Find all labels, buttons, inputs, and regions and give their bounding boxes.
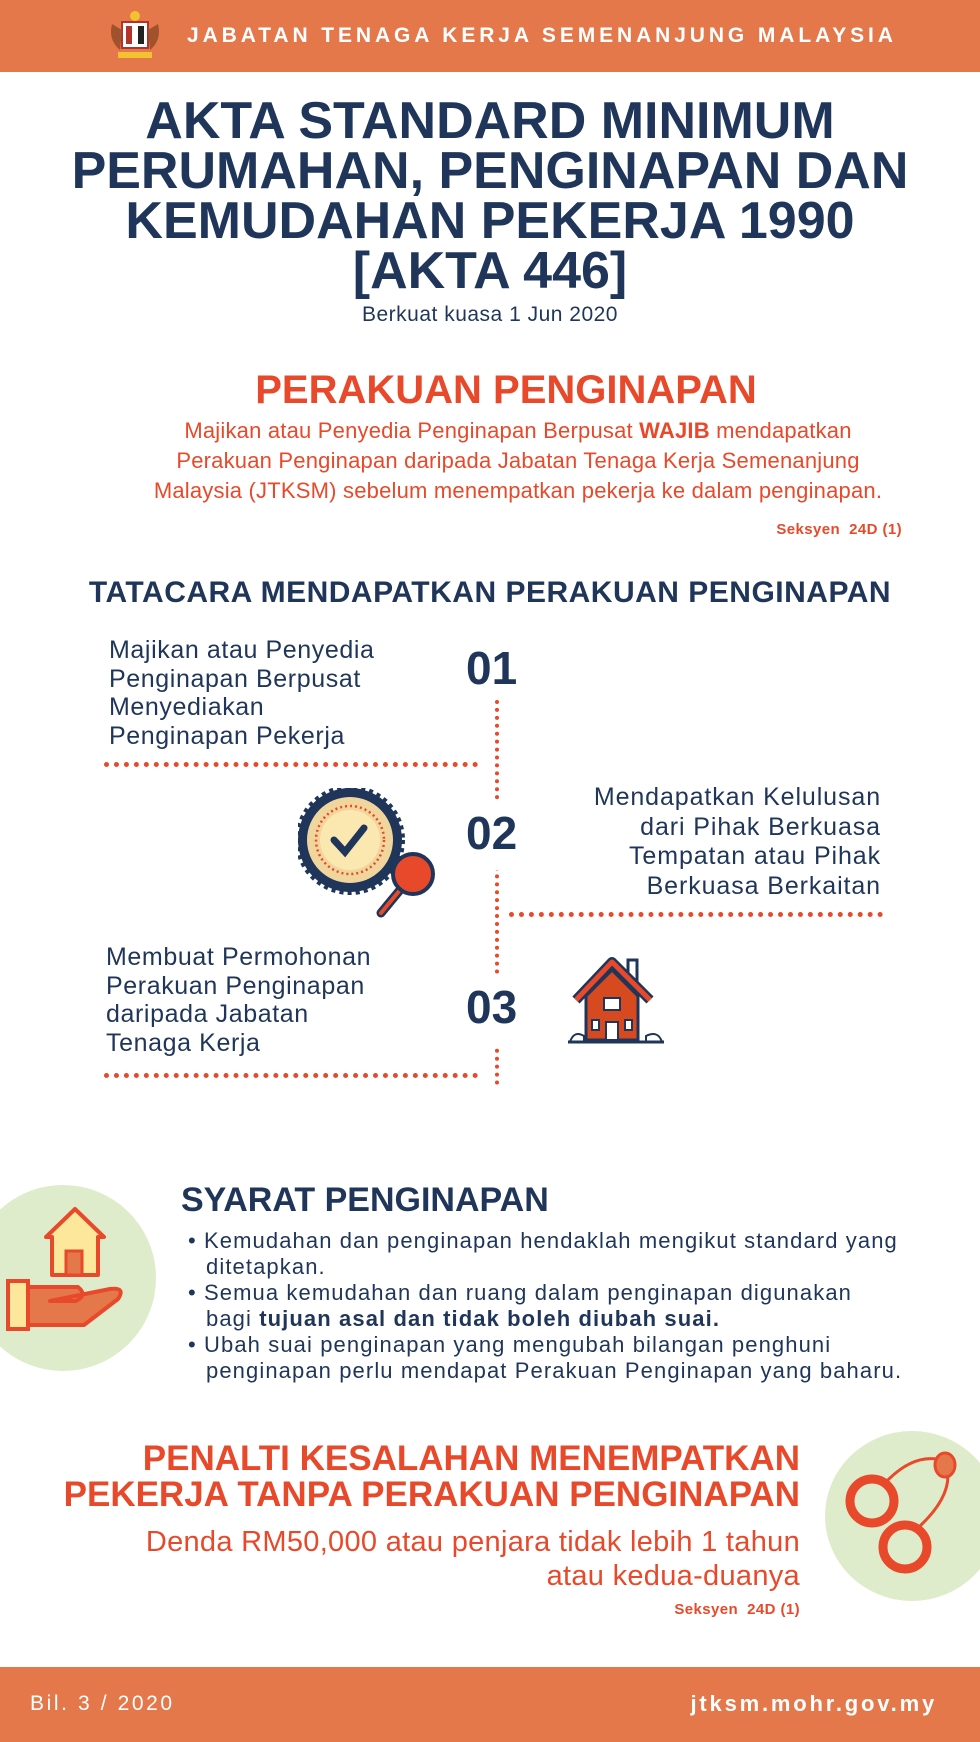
penalty heading: PEKERJA TANPA PERAKUAN PENGINAPAN: [64, 1475, 800, 1514]
perakuan paragraph: [154, 418, 882, 503]
step 3 text: Perakuan Penginapan: [106, 972, 365, 1000]
step 2 number: 02: [466, 807, 517, 859]
icon: hand holding house in green circle: [0, 1185, 156, 1371]
syarat bullet list: ditetapkan.: [206, 1254, 326, 1279]
icon: house: [568, 957, 664, 1044]
footer bar: [0, 1667, 980, 1742]
syarat bullet list: penginapan perlu mendapat Perakuan Penginapan yang baharu.: [206, 1358, 902, 1383]
step 2 number: [462, 802, 521, 870]
penalty heading: [64, 1439, 800, 1514]
step 1 number: 01: [466, 642, 517, 694]
title: PERUMAHAN, PENGINAPAN DAN: [72, 142, 908, 200]
section reference 1: Seksyen 24D (1): [776, 521, 902, 538]
perakuan paragraph: Majikan atau Penyedia Penginapan Berpusat WAJIB mendapatkan: [184, 418, 852, 443]
title: KEMUDAHAN PEKERJA 1990: [125, 192, 855, 250]
heading: tatacara: TATACARA MENDAPATKAN PERAKUAN PENGINAPAN: [89, 576, 891, 609]
step 3 text: Membuat Permohonan: [106, 943, 371, 971]
footer website: jtksm.mohr.gov.my: [691, 1691, 937, 1716]
step 1 text: Penginapan Pekerja: [109, 722, 345, 750]
syarat heading: SYARAT PENGINAPAN: [181, 1181, 549, 1219]
header text: JABATAN TENAGA KERJA SEMENANJUNG MALAYSIA: [187, 24, 897, 47]
step 2 text: dari Pihak Berkuasa: [640, 812, 881, 840]
syarat bullet list: bagi tujuan asal dan tidak boleh diubah suai.: [206, 1306, 720, 1331]
syarat bullet list: • Kemudahan dan penginapan hendaklah mengikut standard yang: [188, 1228, 898, 1253]
penalty text: Denda RM50,000 atau penjara tidak lebih 1 tahun: [146, 1526, 800, 1558]
step 3 number: [462, 974, 521, 1048]
section reference 2: Seksyen 24D (1): [674, 1601, 800, 1618]
syarat bullet list: • Ubah suai penginapan yang mengubah bilangan penghuni: [188, 1332, 831, 1357]
penalty heading: PENALTI KESALAHAN MENEMPATKAN: [143, 1439, 800, 1478]
step 3 text: [106, 943, 371, 1056]
vertical dotted line: [495, 700, 499, 1085]
penalty text: [146, 1526, 800, 1592]
penalty text: atau kedua-duanya: [547, 1560, 800, 1592]
icon: emblem: [111, 11, 159, 58]
step 3 number: 03: [466, 981, 517, 1033]
perakuan paragraph: Perakuan Penginapan daripada Jabatan Tenaga Kerja Semenanjung: [176, 448, 860, 473]
step 1 text: [109, 636, 375, 750]
step 1 text: Menyediakan: [109, 693, 264, 721]
step 2 text: [594, 783, 881, 900]
step 2 text: Mendapatkan Kelulusan: [594, 783, 881, 811]
panel: syarat penginapan: [0, 1181, 902, 1383]
perakuan paragraph: Malaysia (JTKSM) sebelum menempatkan pekerja ke dalam penginapan.: [154, 478, 882, 503]
step 3 text: daripada Jabatan: [106, 1000, 309, 1028]
title: [72, 92, 908, 300]
icon: handcuffs in green circle: [825, 1431, 980, 1601]
footer issue number: Bil. 3 / 2020: [30, 1692, 175, 1715]
title: [AKTA 446]: [353, 242, 627, 300]
step 2 text: Tempatan atau Pihak: [629, 842, 881, 870]
step 3 text: Tenaga Kerja: [106, 1028, 261, 1056]
step 1 text: Penginapan Berpusat: [109, 664, 361, 692]
icon: approval seal with magnifier: [298, 788, 435, 918]
step 1 text: Majikan atau Penyedia: [109, 636, 375, 664]
syarat bullet list: [188, 1228, 902, 1383]
title: AKTA STANDARD MINIMUM: [145, 92, 835, 150]
heading: perakuan penginapan: PERAKUAN PENGINAPAN: [255, 368, 757, 412]
header bar: [0, 0, 980, 72]
syarat bullet list: • Semua kemudahan dan ruang dalam penginapan digunakan: [188, 1280, 852, 1305]
step 2 text: Berkuasa Berkaitan: [647, 872, 881, 900]
subtitle date: Berkuat kuasa 1 Jun 2020: [362, 303, 618, 326]
